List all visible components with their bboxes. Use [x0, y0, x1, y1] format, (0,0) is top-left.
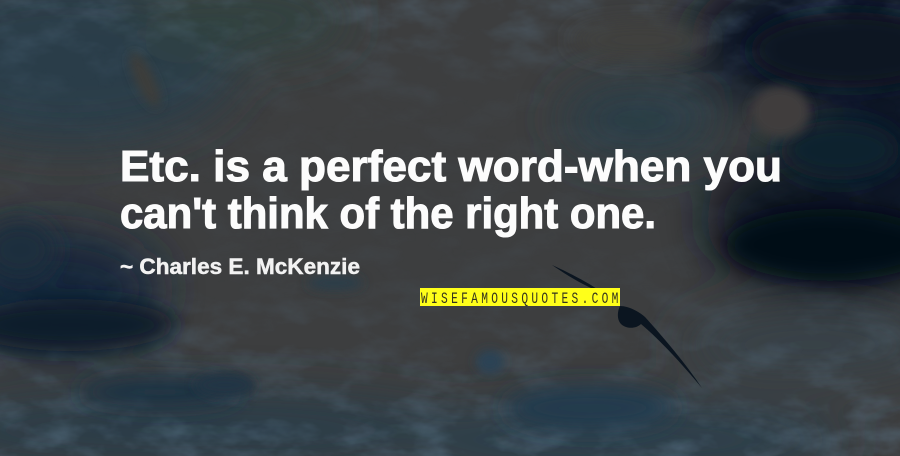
quote text	[120, 142, 782, 238]
watermark badge: WISEFAMOUSQUOTES.COM	[421, 291, 618, 309]
icon: bird silhouette	[552, 265, 702, 388]
quote text: can't think of the right one.	[120, 189, 656, 238]
quote text: Etc. is a perfect word-when you	[120, 142, 782, 191]
author attribution: ~ Charles E. McKenzie	[120, 254, 360, 279]
